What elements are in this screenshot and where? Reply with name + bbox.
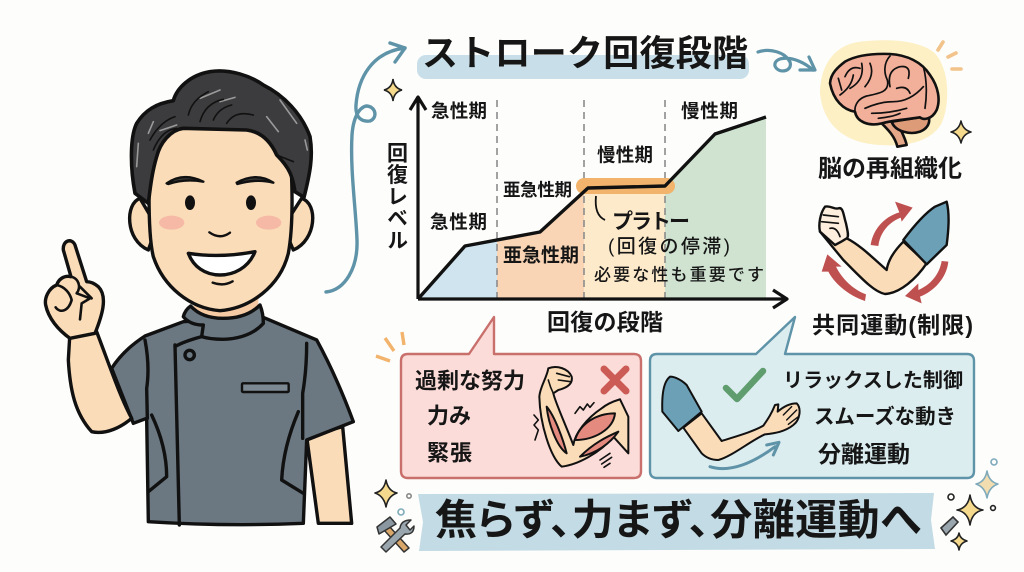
doctor hair (131, 71, 311, 203)
chart: stroke recovery curve: 慢性期 (681, 100, 738, 122)
title: ストローク回復段階 (422, 32, 748, 74)
icon: brain sparkle and rays (938, 42, 971, 143)
chart: stroke recovery curve: 必要な性も重要です (594, 266, 764, 284)
label: synergy movement: 共同運動(制限) (812, 312, 973, 338)
chart: stroke recovery curve: (回復の停滞) (608, 236, 730, 258)
label: brain reorganisation: 脳の再組織化 (818, 156, 962, 182)
icon: character doctor (45, 71, 353, 525)
banner: closing message: 焦らず、力まず、分離運動へ (435, 496, 921, 544)
arrow: right swirl to brain (758, 50, 815, 71)
panel: relaxed control (650, 317, 974, 478)
panel: relaxed control: リラックスした制御 (783, 369, 963, 392)
icon: synergy arm (819, 202, 949, 303)
icon: brain (820, 40, 947, 147)
icon: green check (726, 371, 763, 399)
chart: stroke recovery curve: 慢性期 (597, 144, 653, 166)
icon: decorative sparkles (375, 459, 998, 550)
icon: red cross (604, 369, 626, 391)
icon: tense flexed arm (534, 367, 628, 467)
icon: relaxed arm (662, 377, 800, 469)
panel: excess effort: 緊張 (427, 440, 472, 466)
chart: stroke recovery curve: 亜急性期 (503, 180, 572, 200)
arrow: left swirl to title (326, 43, 405, 292)
chart: stroke recovery curve: 回復の段階 (547, 309, 663, 335)
panel: relaxed control: 分離運動 (818, 441, 910, 467)
chart: stroke recovery curve: プラトー (612, 210, 690, 234)
icon: orange emphasis rays (376, 332, 404, 361)
panel: excess effort: 力み (427, 404, 471, 428)
panel: excess effort (401, 317, 641, 478)
chart: stroke recovery curve: 回復レベル (384, 142, 408, 250)
panel: relaxed control: スムーズな動き (814, 404, 956, 428)
panel: excess effort: 過剰な努力 (415, 368, 525, 394)
chart: stroke recovery curve: 急性期 (431, 100, 487, 122)
chart: stroke recovery curve (384, 97, 787, 335)
icon: tools (377, 517, 414, 552)
doctor hand pointing (45, 241, 103, 338)
icon: eraser (941, 517, 958, 535)
chart: stroke recovery curve: 急性期 (430, 212, 487, 232)
icon: sparkle (384, 79, 402, 101)
chart: stroke recovery curve: 亜急性期 (503, 244, 579, 266)
